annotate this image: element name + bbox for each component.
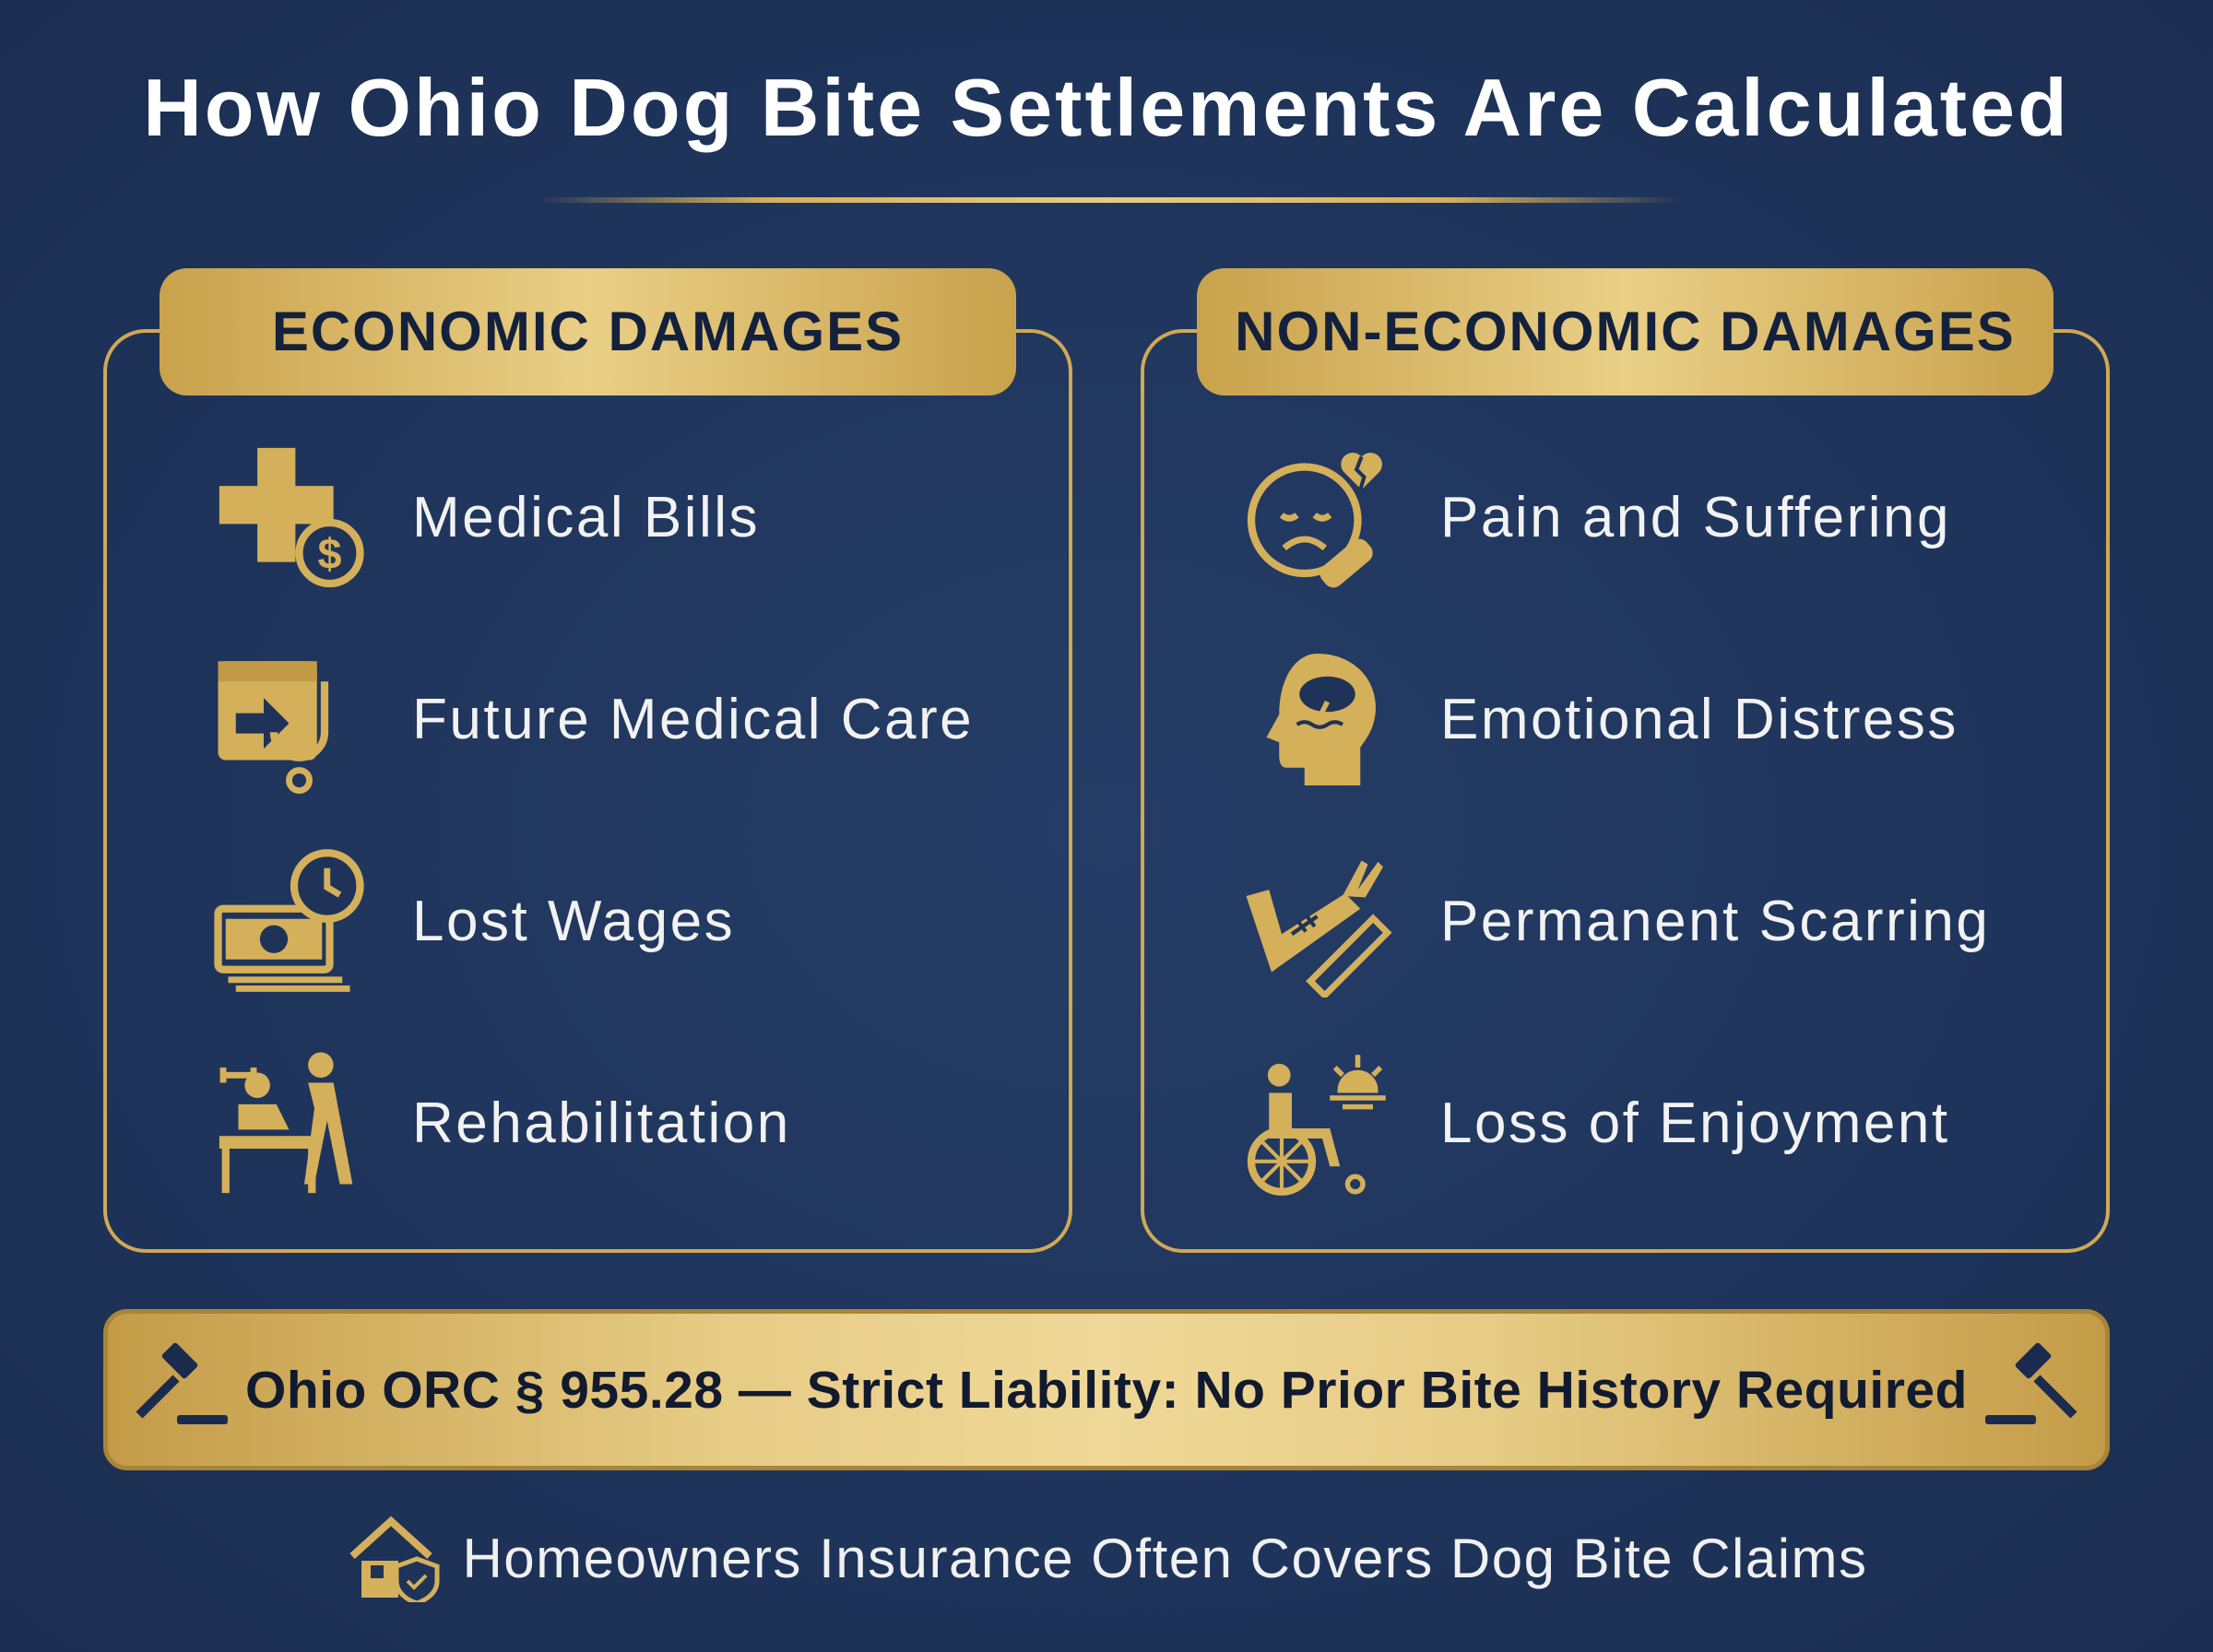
item: medical bills: $ (317, 529, 342, 577)
tab: economic damages (160, 268, 1016, 395)
list: non-economic items (1247, 453, 1990, 1196)
item: medical bills (219, 448, 760, 588)
banner: Ohio ORC strict liability (103, 1309, 2110, 1470)
footer: homeowners insurance: Homeowners Insurance Often Covers Dog Bite Claims (462, 1527, 1868, 1589)
item: future medical care (218, 661, 974, 794)
item: medical bills: Medical Bills (412, 485, 760, 549)
tab: economic damages: ECONOMIC DAMAGES (272, 301, 904, 362)
list: economic items (214, 448, 974, 1193)
item: lost wages (214, 849, 735, 992)
tab: non-economic damages (1197, 268, 2053, 395)
panel: non-economic damages (1141, 329, 2110, 1253)
tab: non-economic damages: NON-ECONOMIC DAMAGES (1235, 301, 2016, 362)
item: loss of enjoyment: Loss of Enjoyment (1440, 1092, 1950, 1154)
item: emotional distress: Emotional Distress (1440, 688, 1959, 750)
item: pain and suffering: Pain and Suffering (1440, 485, 1951, 549)
title: How Ohio Dog Bite Settlements Are Calculated (143, 62, 2070, 153)
item: emotional distress (1267, 654, 1959, 785)
icon: gavel left (136, 1342, 228, 1424)
item: lost wages: Lost Wages (412, 889, 735, 953)
item: rehabilitation: Rehabilitation (412, 1092, 791, 1154)
item: future medical care: Future Medical Care (412, 688, 974, 750)
footer: homeowners insurance (349, 1516, 1868, 1602)
panel: economic damages (103, 329, 1072, 1253)
icon: gavel right (1985, 1342, 2077, 1424)
item: permanent scarring: Permanent Scarring (1440, 889, 1990, 953)
banner: Ohio ORC strict liability: Ohio ORC § 955.28 — Strict Liability: No Prior Bite History Required (245, 1361, 1968, 1420)
item: loss of enjoyment (1247, 1055, 1950, 1196)
item: rehabilitation (219, 1053, 791, 1193)
icon: house shield (349, 1516, 439, 1602)
item: permanent scarring (1247, 861, 1990, 997)
item: pain and suffering (1247, 453, 1951, 588)
